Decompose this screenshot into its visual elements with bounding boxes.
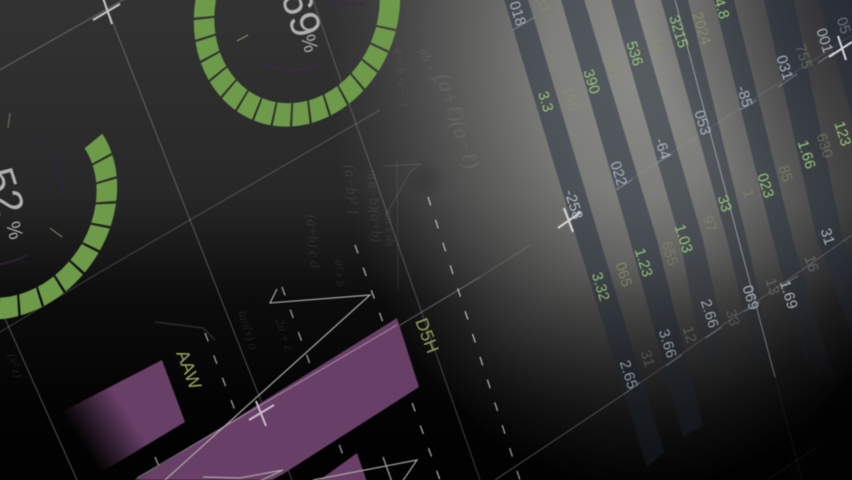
table values: 2.65 (616, 358, 641, 391)
table values: 018 (505, 0, 529, 28)
table values: 16 (801, 253, 822, 274)
faint math formulas: (a−b)² 1 (341, 164, 360, 216)
label: AAW: AAW (172, 347, 205, 392)
chart: segmented ring 52% (0, 47, 154, 369)
table values: 144 (642, 26, 666, 55)
table values: 31 (817, 226, 838, 247)
table values: 3.3 (534, 89, 557, 114)
table values: 1.66 (794, 138, 819, 171)
table values: 1.03 (671, 222, 696, 255)
faint math formulas: (a+b) c d (303, 214, 321, 269)
faint math formulas: a = b · c − 1 (392, 47, 411, 109)
table values: 630 (812, 131, 836, 160)
table values: -64 (651, 136, 674, 162)
bar: third purple (317, 453, 367, 480)
table values: 755 (791, 42, 815, 71)
table values: 065 (611, 260, 635, 289)
chart: segmented ring 69% (133, 0, 461, 203)
table values: 390 (579, 67, 603, 96)
table values: 1.23 (631, 246, 656, 279)
table values: 131 (599, 54, 623, 83)
faint math formulas: a² x b (332, 259, 348, 287)
table values: -258 (561, 188, 586, 221)
data table bands (503, 0, 852, 467)
dashed lines (155, 197, 520, 480)
crosshair markers (93, 0, 852, 426)
table values: 022 (606, 159, 630, 188)
lower right fade (440, 250, 852, 480)
table values: 1 (739, 187, 758, 200)
table values: 001 (812, 26, 836, 55)
ring 52% accents (0, 113, 63, 264)
table tick marks (513, 17, 834, 392)
table values: 2.66 (697, 297, 722, 330)
table values: -85 (733, 84, 756, 110)
table values: 655 (657, 239, 681, 268)
faint math formulas (5, 46, 485, 379)
table values: 2024 (688, 10, 714, 47)
table values: 156 (558, 84, 582, 113)
table values: 13 (762, 276, 783, 297)
table values: 3.32 (588, 270, 613, 303)
faint math formulas: (x² z) (5, 352, 26, 379)
table values: 3215 (665, 13, 691, 50)
ring 69% accents (237, 0, 365, 70)
faint math formulas: (a+ℓ)(a−ℓ) (431, 70, 485, 172)
bar: D5H (137, 318, 419, 480)
table values: 031 (772, 53, 796, 82)
faint math formulas: sin x dx (382, 209, 398, 247)
table values: 3.66 (655, 327, 680, 360)
bar: AAW (46, 360, 185, 473)
table values: 053 (690, 108, 714, 137)
faint math formulas: π(a−b)(a+b) (364, 169, 383, 243)
table values: 023 (753, 171, 777, 200)
table values: 33 (714, 193, 735, 214)
faint math formulas: ab + x² (417, 46, 443, 88)
table values: 97 (699, 213, 720, 234)
table values: 85 (775, 163, 796, 184)
faint math formulas: tan(x) a (235, 308, 262, 352)
table values: 1.69 (776, 278, 801, 311)
table values (505, 0, 852, 391)
label: 69%: % (296, 32, 322, 55)
table values: 31 (637, 348, 658, 369)
line chart overlays (137, 289, 417, 480)
label: D5H: D5H (411, 315, 443, 356)
table values: 069 (738, 283, 762, 312)
label: 52%: % (1, 219, 27, 242)
table values: 12 (679, 324, 700, 345)
faint math formulas: 2a + c (272, 316, 297, 353)
table values: 536 (622, 39, 646, 68)
table values: 33 (722, 307, 743, 328)
